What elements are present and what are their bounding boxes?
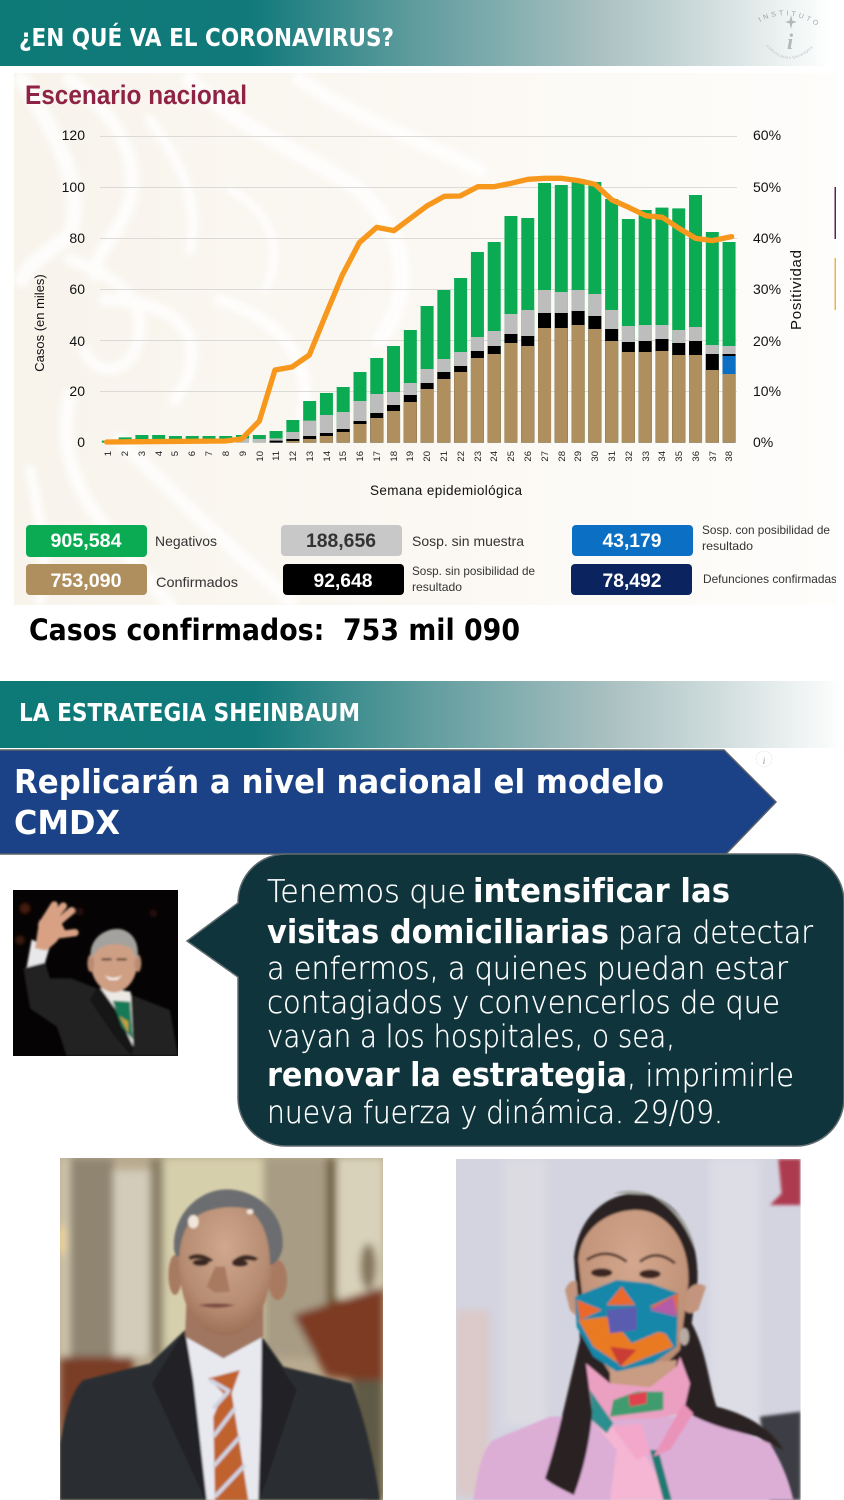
series: sospechosos sin muestra (236, 290, 736, 443)
x axis: semanas: 34 (657, 451, 668, 462)
callout text: visitas domiciliarias (267, 912, 609, 951)
legend item: defunciones: Defunciones confirmadas (703, 572, 837, 586)
legend item: sospechosos con posibilidad (572, 523, 830, 556)
y axis: positividad: 30% (753, 281, 781, 297)
x axis: semanas: 11 (271, 451, 282, 461)
title line 2: CMDX (14, 803, 120, 842)
heading: second banner: LA ESTRATEGIA SHEINBAUM (19, 698, 360, 727)
logo: small Instituto mark: i (763, 756, 766, 766)
y axis: positividad: 50% (753, 179, 781, 195)
axis title: Positividad: Positividad (788, 250, 805, 330)
x axis: semanas: 23 (473, 451, 484, 462)
legend item: sospechosos sin muestra (281, 525, 524, 556)
x axis: semanas: 14 (322, 451, 333, 462)
x axis: semanas: 19 (405, 451, 416, 462)
legend item: negativos (26, 525, 217, 557)
y axis: casos: 60 (69, 281, 85, 297)
series: sin posibilidad de resultado (270, 311, 736, 443)
callout text: intensificar las (473, 871, 730, 910)
banner: La estrategia Sheinbaum (0, 681, 844, 748)
legend item: confirmados (26, 564, 238, 595)
x axis: semanas: 29 (573, 451, 584, 462)
axis title: Semana epidemiológica: Semana epidemiológica (370, 483, 522, 498)
legend item: sospechosos sin posibilidad: Sosp. sin posibilidad de (412, 564, 535, 578)
x axis: semanas: 21 (439, 451, 450, 462)
legend item: sospechosos sin posibilidad: 92,648 (314, 571, 372, 592)
x axis: semanas: 8 (221, 451, 232, 456)
photo: López Obrador waving (13, 890, 178, 1056)
legend (26, 523, 837, 595)
text: casos confirmados: Casos confirmados: 753 mil 090 (29, 613, 520, 647)
legend item: defunciones (571, 564, 837, 595)
x axis: semanas: 18 (389, 451, 400, 462)
title line 1: Replicarán a nivel nacional el modelo (14, 762, 664, 801)
logo: Instituto (758, 10, 818, 59)
x axis: semanas (103, 451, 735, 462)
y axis: casos: 100 (62, 179, 85, 195)
x axis: semanas: 38 (724, 451, 735, 462)
panel: escenario nacional (14, 73, 837, 605)
x axis: semanas: 20 (422, 451, 433, 462)
callout text: para detectar (618, 915, 813, 951)
x axis: semanas: 1 (103, 451, 114, 456)
x axis: semanas: 4 (154, 451, 165, 456)
y axis: positividad: 10% (753, 383, 781, 399)
photo: Claudia Sheinbaum (456, 1159, 801, 1500)
legend item: defunciones: 78,492 (602, 571, 662, 592)
logo: Instituto: i (787, 29, 794, 54)
legend item: confirmados: 753,090 (50, 571, 122, 592)
x axis: semanas: 5 (170, 451, 181, 456)
legend item: sospechosos sin muestra: 188,656 (306, 531, 376, 552)
x axis: semanas: 35 (674, 451, 685, 462)
y axis: casos: 80 (69, 230, 85, 246)
y axis: positividad: 40% (753, 230, 781, 246)
callout text: nueva fuerza y dinámica. 29/09. (267, 1095, 723, 1131)
y axis: casos: 20 (69, 383, 85, 399)
callout text (267, 871, 813, 1131)
x axis: semanas: 25 (506, 451, 517, 462)
x axis: semanas: 37 (708, 451, 719, 462)
callout text: vayan a los hospitales, o sea, (267, 1019, 675, 1055)
x axis: semanas: 17 (372, 451, 383, 462)
y axis: positividad: 0% (753, 434, 773, 450)
logo: Instituto: INSTITUTO (758, 10, 818, 25)
legend item: sospechosos con posibilidad: Sosp. con posibilidad de (702, 523, 830, 537)
callout text: Tenemos que (267, 874, 466, 910)
x axis: semanas: 31 (607, 451, 618, 462)
bars: semanas 1 a 38 (102, 178, 736, 443)
y axis: positividad (753, 127, 781, 450)
x axis: semanas: 30 (590, 451, 601, 462)
series: confirmados (286, 325, 736, 443)
callout: speech bubble (187, 854, 844, 1146)
y axis: positividad: 20% (753, 333, 781, 349)
x axis: semanas: 27 (540, 451, 551, 462)
heading: top banner: ¿EN QUÉ VA EL CORONAVIRUS? (19, 23, 394, 52)
arrow banner: replicarán a nivel nacional (0, 750, 776, 854)
x axis: semanas: 32 (624, 451, 635, 462)
x axis: semanas: 16 (355, 451, 366, 462)
banner: ¿En qué va el coronavirus? (0, 0, 830, 66)
x axis: semanas: 3 (137, 451, 148, 456)
legend item: negativos: 905,584 (50, 531, 122, 552)
legend item: sospechosos con posibilidad: 43,179 (602, 531, 662, 552)
axis title: Casos (en miles): Casos (en miles) (32, 274, 47, 372)
legend item: sospechosos sin posibilidad: resultado (412, 580, 462, 594)
photo: Hugo López-Gatell (58, 1158, 383, 1500)
x axis: semanas: 33 (641, 451, 652, 462)
x axis: semanas: 10 (255, 451, 266, 462)
line: positividad (107, 178, 732, 442)
y axis: casos: 120 (62, 127, 85, 143)
y axis: casos: 0 (77, 434, 85, 450)
y axis: casos (62, 127, 85, 450)
clipped legend marks at right edge (834, 187, 836, 310)
x axis: semanas: 36 (691, 451, 702, 462)
x axis: semanas: 6 (187, 451, 198, 456)
chart: casos y positividad por semana (32, 127, 805, 498)
x axis: semanas: 15 (338, 451, 349, 462)
series: negativos (102, 179, 736, 443)
x axis: semanas: 9 (238, 451, 249, 456)
legend item: sospechosos sin posibilidad (283, 564, 535, 595)
heading: Escenario nacional: Escenario nacional (25, 80, 247, 110)
y axis: casos: 40 (69, 333, 85, 349)
callout text: contagiados y convencerlos de que (267, 985, 780, 1021)
callout text: a enfermos, a quienes puedan estar (267, 951, 788, 987)
x axis: semanas: 22 (456, 451, 467, 462)
x axis: semanas: 7 (204, 451, 215, 456)
x axis: semanas: 2 (120, 451, 131, 456)
x axis: semanas: 13 (305, 451, 316, 462)
legend item: sospechosos sin muestra: Sosp. sin muestra (412, 533, 524, 549)
x axis: semanas: 12 (288, 451, 299, 462)
x axis: semanas: 26 (523, 451, 534, 462)
legend item: confirmados: Confirmados (156, 574, 238, 590)
y axis: positividad: 60% (753, 127, 781, 143)
legend item: sospechosos con posibilidad: resultado (702, 539, 753, 553)
x axis: semanas: 24 (489, 451, 500, 462)
legend item: negativos: Negativos (155, 533, 217, 549)
logo: Instituto: Comunicación Estratégica (766, 44, 812, 59)
logo: small Instituto mark (756, 751, 772, 767)
callout text: renovar la estrategia (267, 1055, 627, 1094)
x axis: semanas: 28 (557, 451, 568, 462)
series: con posibilidad de resultado (723, 356, 736, 443)
callout text: , imprimirle (627, 1058, 794, 1094)
